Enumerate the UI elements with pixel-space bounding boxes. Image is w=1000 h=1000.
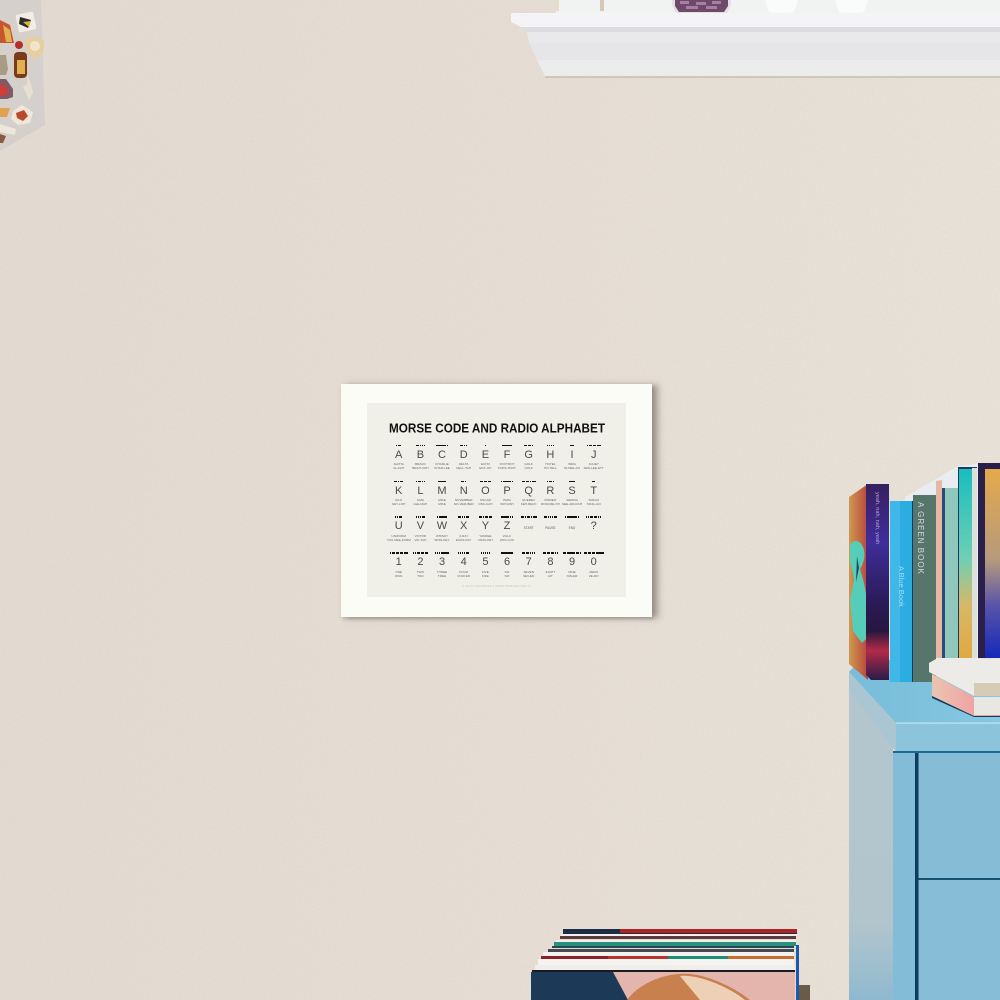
cell: 9: 9 [569,556,575,568]
cell: A [393,445,404,470]
cell: 0 [579,553,609,585]
cell: H [544,445,557,470]
cell: V: VIK-TAH [414,538,426,542]
cell: 1: 1 [396,556,402,568]
cell: 3: TREE [438,574,446,578]
cell: Y: YANKEE [479,534,492,538]
cell: T: TANGO [588,498,599,502]
cell: O [478,481,492,506]
cell: G: GOLF [524,462,533,466]
cell: K: KEY-LOH [392,502,405,506]
book: ampersand cover [849,484,889,680]
cell: END: END [569,526,575,530]
cell: Z: ZOO-LOO [500,538,514,542]
cell: N [454,481,474,506]
cell: 8: AIT [548,574,553,578]
cell: L: L [417,484,423,496]
cell: D: DELTA [459,462,468,466]
cell: 5: FIVE [482,570,489,574]
cell: F [498,445,516,470]
cell: O: OSS-CAH [478,502,492,506]
cell: G: G [524,448,533,460]
cell: B: B [417,448,424,460]
cell: E: ECK-OH [479,466,491,470]
cell: L [414,481,427,506]
cell: N: N [460,484,468,496]
cell: U: YOU-NEE-FORM [387,538,411,542]
poster inner panel [367,403,626,597]
cell: I [564,445,580,470]
cell: 7: 7 [526,556,532,568]
cell: B [412,445,429,470]
cell: H: H [546,448,554,460]
cell: 0: ZE-RO [589,574,598,578]
cell: W: W [437,520,447,532]
cell: J: JULIET [589,462,599,466]
cell: F: FOXTROT [500,462,514,466]
cell: 4: FOUR [459,570,468,574]
cell: 5: FIFE [482,574,489,578]
cell: Q: Q [524,484,533,496]
cell: V: VICTOR [415,534,426,538]
cell: J: J [591,448,596,460]
poster paper with shadow [341,384,652,617]
cell: 1 [390,552,408,578]
cell: R: ROW-ME-OH [541,502,560,506]
cell: 8 [543,552,558,578]
cell: U [386,516,411,542]
cell: 8: EIGHT [546,570,555,574]
cell: F: FOKS-TROT [498,466,516,470]
cell: E [479,445,492,470]
cell: Q: KEH-BECK [521,502,537,506]
cell: Q [521,481,537,506]
book: ampersand cover: yeah, nah, nah, yeah [874,492,880,544]
cell: C: C [438,448,446,460]
book: pale teal [942,488,958,658]
cell: G [524,445,533,470]
cell: E: E [482,448,489,460]
cell: M: M [437,484,447,496]
cell: Y: YANG-KEY [478,538,493,542]
cell: L: LEE-MAH [414,502,427,506]
cell: 6: SIX [504,574,510,578]
cell: 4: FOW-ER [457,574,470,578]
cell: 7 [522,552,535,578]
cell: W: WHISKY [436,534,448,538]
cell: L: LIMA [417,498,424,502]
white shelf [511,0,1000,78]
cell: D [456,445,471,470]
cell: I: IN-DEE-AH [564,466,580,470]
cell: F: F [504,448,510,460]
cell: 4 [457,552,470,578]
cell: S [562,481,582,506]
books on the cabinet [849,463,1000,682]
cell: question mark: ? [591,520,597,532]
cell: M: MIKE [438,502,446,506]
cell: W [434,516,450,542]
cell: 3: 3 [439,556,445,568]
cell: V [414,516,426,542]
cell: C: CHARLIE [435,462,449,466]
cell: P: P [503,484,511,496]
cell: R: ROMEO [545,498,556,502]
cell: K [392,481,406,506]
cabinet [849,660,1000,1000]
cell: R [541,481,560,506]
book: dark spine with gold and blue [978,463,1000,658]
cell: T: TANG-GO [587,502,601,506]
stack of records [531,929,810,1000]
cell: 5: 5 [482,556,488,568]
book: A Blue Book: A Blue Book [897,566,906,607]
cell: D: D [460,448,468,460]
cell: T [586,481,601,506]
book: A Green Book [913,495,936,682]
cell: X [456,516,472,542]
cell: K: K [395,484,402,496]
cell: S: SEE-AIR-RAH [562,502,582,506]
cell: Q: QUEBEC [522,498,535,502]
cell: 2: TWO [417,570,424,574]
title: MORSE CODE AND RADIO ALPHABET [389,422,605,436]
cell: P: PAH-PAH [500,502,514,506]
cell: M: MIKE [438,498,446,502]
cell: S: S [568,484,576,496]
cell: 7: SEV-EN [523,574,534,578]
cell: 8: 8 [547,556,553,568]
stacked books [929,659,1000,717]
cell: H: HOTEL [545,462,556,466]
cell: A: A [395,448,402,460]
cell: A: ALPHA [394,462,404,466]
cell: U: U [395,520,403,532]
cell: X: ECKS-RAY [456,538,471,542]
cell: Y: Y [482,520,489,532]
cell: B: BRAH-VOH [412,466,429,470]
cell: 6: 6 [504,556,510,568]
cell: U: UNIFORM [391,534,406,538]
cell: S: SIERRA [566,498,578,502]
cell: PAUSE: PAUSE [545,526,556,530]
book: A Green Book: A GREEN BOOK [916,502,925,575]
cell: 3: THREE [437,570,447,574]
pennant with enamel pins [0,0,45,151]
cell: R: R [546,484,554,496]
cell: 2 [413,552,428,578]
cell: X: X-RAY [459,534,468,538]
cell: 6: SIX [504,570,510,574]
cell: G: GOLF [524,466,533,470]
drawer upper [918,753,1000,878]
cell: A: AL-FAH [393,466,404,470]
cell: J: JEW-LEE-ETT [584,466,604,470]
cell: 5 [481,552,490,578]
cell: X: X [460,520,467,532]
cell: K: KILO [395,498,402,502]
cell: B: BRAVO [415,462,426,466]
cell: N: NOVEMBER [455,498,473,502]
cell: E: ECHO [481,462,490,466]
cell: START: START [524,526,534,530]
cell: 1: ONE [395,570,402,574]
cell: 4: 4 [461,556,467,568]
cell: P: PAPA [503,498,511,502]
cell: 7: SEVEN [523,570,534,574]
cell: I: I [570,448,574,460]
cell: Z [500,516,514,542]
cell: 9 [563,552,581,578]
cell: 0: ZERO [589,570,598,574]
drawer lower [918,880,1000,1000]
book: A Blue Book [890,501,914,682]
cell: C: CHAR-LEE [434,466,450,470]
cell: C [434,445,450,470]
cell: 3 [435,552,449,578]
cell: Z: Z [504,520,510,532]
cell: D: DELL-TAH [456,466,471,470]
cell: O: O [481,484,490,496]
cell: T: T [590,484,597,496]
cell: V: V [417,520,424,532]
cell: N: NO-VEM-BER [454,502,474,506]
cell: M [437,481,447,506]
cell: H: HO-TELL [544,466,557,470]
cell: 9: NINE [568,570,576,574]
cell: 6 [501,552,513,578]
book: teal and gold [958,467,977,658]
cell: W: WISS-KEY [434,538,450,542]
cell: P [500,481,514,506]
cell: O: OSCAR [480,498,491,502]
cell: J [584,445,604,470]
cell: I: INDIA [568,462,576,466]
cell: Z: ZULU [503,534,511,538]
cell: 2: TOO [417,574,424,578]
cell: 1: WUN [395,574,402,578]
cell: 2: 2 [417,556,423,568]
white bookend [905,464,978,660]
cell: 9: NIN-ER [567,574,577,578]
cell: Y [478,516,494,542]
footer credit: © 2015 LEOGREEN | WWW.MORSECODE.ID [462,584,531,588]
cell: 0: 0 [591,556,597,568]
